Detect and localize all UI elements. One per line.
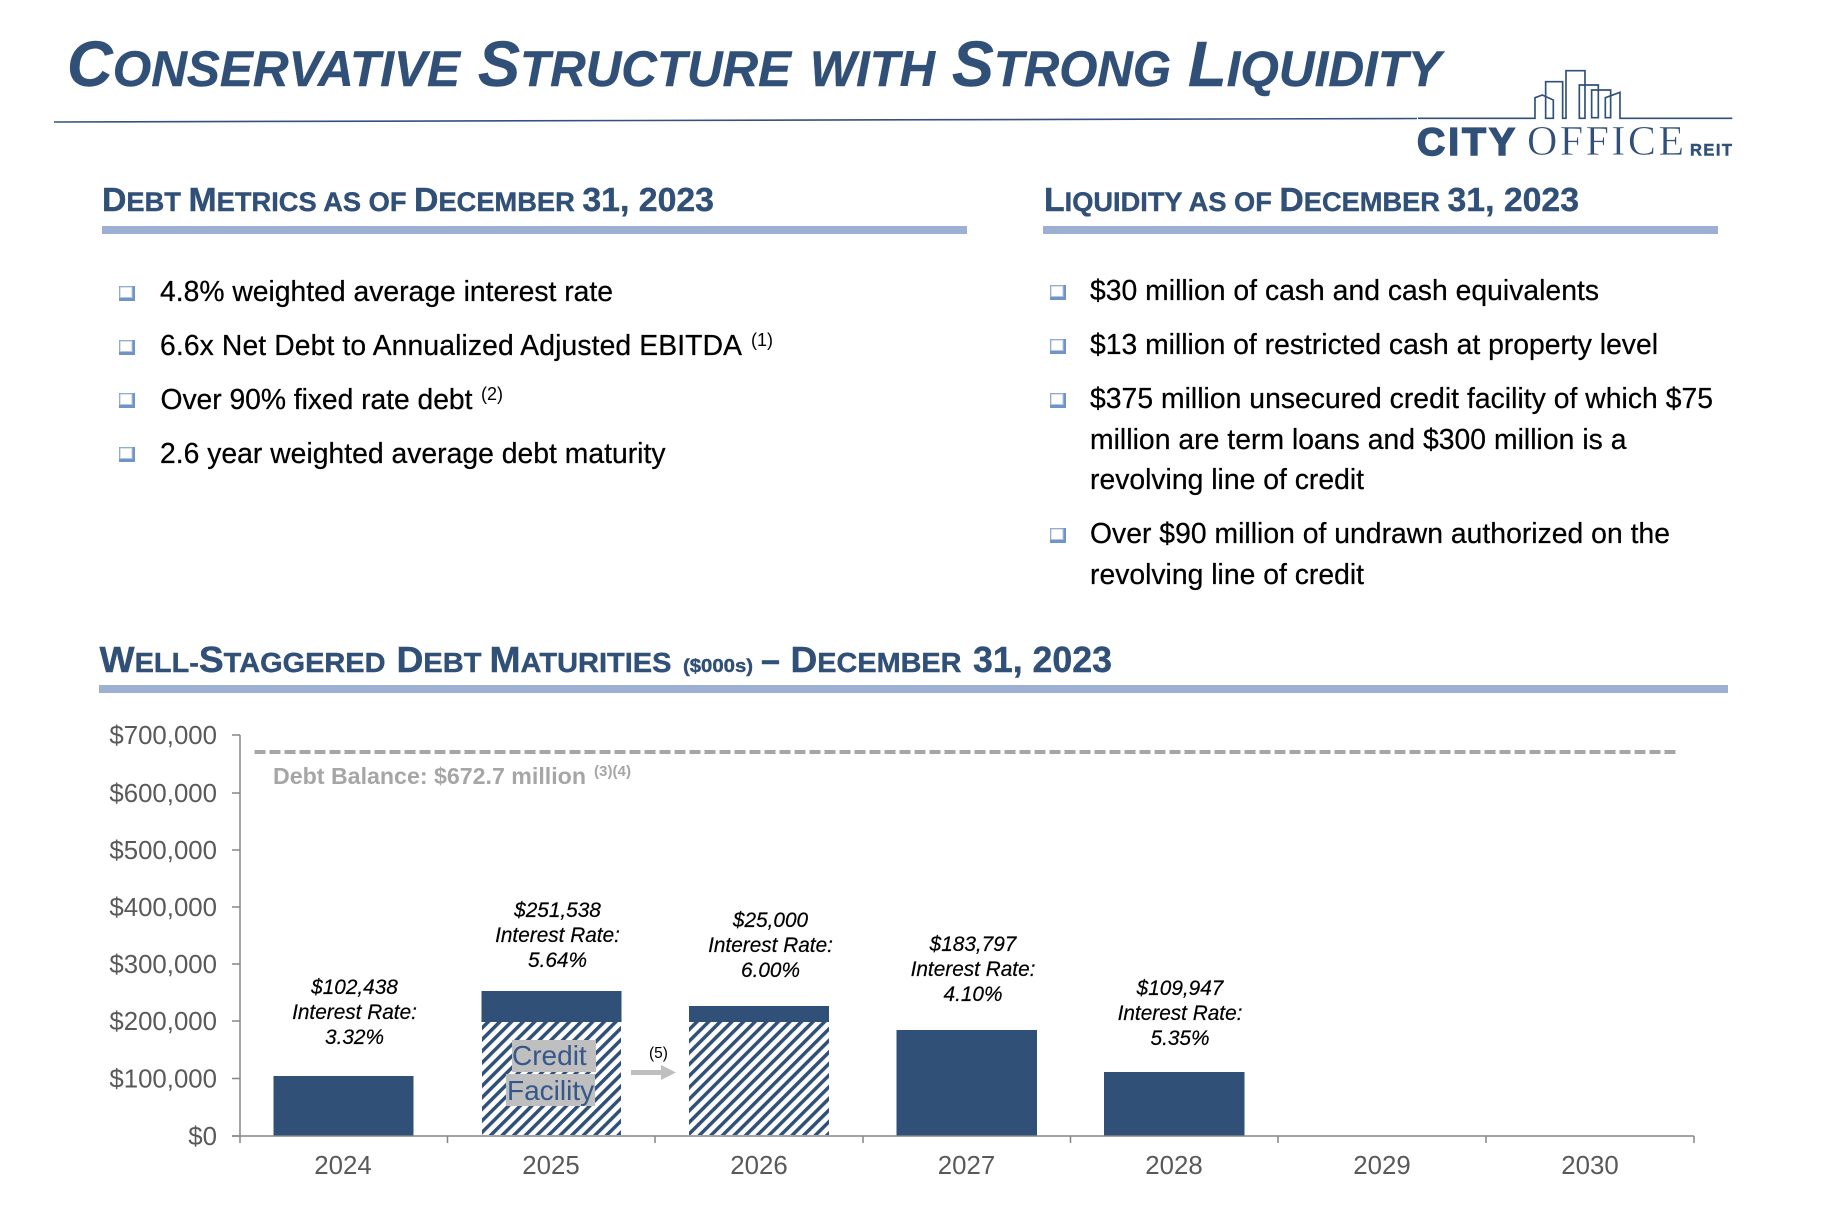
x axis: 2027: [938, 1152, 995, 1180]
y axis: $400,000: [109, 894, 217, 922]
x axis: 2030: [1561, 1152, 1619, 1180]
bullet: cash: $30 million of cash and cash equivalents: [1090, 274, 1599, 306]
bullet: restricted cash: $13 million of restricted cash at property level: [1090, 328, 1658, 360]
bar chart: debt maturities: [109, 722, 1694, 1180]
label: 2028: $109,947: [1136, 977, 1225, 1000]
bullet: undrawn: Over $90 million of undrawn authorized on the: [1090, 517, 1670, 549]
label: 2027: Interest Rate:: [911, 958, 1035, 981]
heading: debt maturities: WELL-STAGGERED: [100, 639, 386, 680]
heading: debt maturities: –: [761, 639, 780, 680]
bullet: interest rate: 4.8% weighted average interest rate: [160, 275, 613, 307]
label: 2025: Interest Rate:: [495, 924, 620, 947]
x axis: 2029: [1353, 1152, 1411, 1180]
heading: debt metrics: DEBT METRICS AS OF DECEMBER 31, 2023: [102, 182, 714, 219]
title: STRONG: [952, 28, 1171, 100]
title: STRUCTURE: [478, 28, 793, 100]
heading: debt maturities: ($000s): [683, 656, 753, 676]
heading: debt maturities: [100, 639, 1112, 680]
y axis: $700,000: [109, 722, 217, 750]
y axis: $300,000: [109, 951, 217, 979]
logo wordmark: Office: OFFICE: [1527, 119, 1684, 165]
heading: debt maturities: 31, 2023: [973, 639, 1112, 680]
heading bar: [99, 685, 1728, 693]
label: 2027: 4.10%: [944, 983, 1002, 1006]
arrow: refinance to 2026: (5): [649, 1045, 668, 1062]
bullet: net debt to EBITDA: (1): [751, 330, 773, 350]
bar: 2024: [274, 1076, 414, 1136]
logo wordmark: City: CITY: [1417, 121, 1515, 164]
label: 2028: Interest Rate:: [1118, 1002, 1242, 1025]
logo wordmark: REIT: REIT: [1690, 142, 1732, 160]
label: 2024: 3.32%: [325, 1026, 384, 1049]
bar: 2028: [1104, 1072, 1244, 1136]
panel: debt metrics: [102, 182, 967, 469]
debt balance line: Debt Balance: $672.7 million: [273, 763, 586, 789]
title: WITH: [810, 41, 936, 97]
bullet: debt maturity: 2.6 year weighted average debt maturity: [160, 437, 666, 469]
label: 2025: $251,538: [513, 899, 601, 922]
bar: 2027: [896, 1030, 1037, 1136]
callout: credit facility: Credit: [512, 1040, 587, 1071]
label: 2026: Interest Rate:: [708, 934, 833, 957]
debt balance line: (3)(4): [594, 764, 631, 780]
title: CONSERVATIVE: [67, 28, 462, 100]
y axis: [109, 722, 240, 1151]
bar: 2026 credit facility portion: [689, 1022, 829, 1135]
bullet: fixed rate debt: (2): [481, 384, 503, 404]
panel: liquidity: [1043, 182, 1718, 590]
x axis: [232, 1136, 1694, 1180]
heading bar: [1043, 226, 1718, 234]
x axis: 2025: [522, 1152, 580, 1180]
title rule: [54, 118, 1417, 122]
label: 2027: $183,797: [929, 933, 1018, 956]
y axis: $200,000: [109, 1008, 217, 1036]
bar: 2025 term portion: [482, 991, 622, 1022]
bullet: credit facility: million are term loans and $300 million is a: [1090, 423, 1627, 455]
label: 2028: 5.35%: [1151, 1027, 1209, 1050]
y axis: $0: [188, 1123, 217, 1151]
bullet: undrawn: revolving line of credit: [1090, 558, 1364, 590]
callout: credit facility: Facility: [507, 1075, 594, 1106]
debt balance line: [254, 752, 1678, 789]
x axis: 2026: [730, 1152, 788, 1180]
bullet: net debt to EBITDA: 6.6x Net Debt to Annualized Adjusted EBITDA: [160, 329, 742, 361]
logo: City Office REIT: [1417, 71, 1732, 165]
bar: 2025 credit facility portion: [482, 1022, 621, 1135]
bullet: undrawn: [1050, 517, 1670, 590]
label: 2024: Interest Rate:: [292, 1001, 417, 1024]
label: 2026: $25,000: [732, 909, 809, 932]
bullet: fixed rate debt: Over 90% fixed rate debt: [160, 383, 473, 415]
title: LIQUIDITY: [1188, 28, 1446, 100]
heading: liquidity: LIQUIDITY AS OF DECEMBER 31, 2023: [1044, 182, 1579, 219]
y axis: $100,000: [109, 1066, 217, 1094]
title: [67, 28, 1446, 100]
heading: debt maturities: DEBT MATURITIES: [396, 639, 672, 680]
y axis: $500,000: [109, 837, 217, 865]
callout: credit facility: [506, 1040, 596, 1106]
bar: 2026 term portion: [689, 1006, 829, 1022]
bullet: credit facility: revolving line of credit: [1090, 463, 1364, 495]
y axis: $600,000: [109, 780, 217, 808]
x axis: 2028: [1145, 1152, 1203, 1180]
heading: debt maturities: DECEMBER: [790, 639, 962, 680]
label: 2025: 5.64%: [528, 949, 587, 972]
label: 2026: 6.00%: [741, 959, 800, 982]
x axis: 2024: [314, 1152, 372, 1180]
label: 2024: $102,438: [310, 976, 398, 999]
icon: skyline: [1418, 71, 1732, 118]
bullet: credit facility: [1050, 382, 1713, 495]
bullet: credit facility: $375 million unsecured credit facility of which $75: [1090, 382, 1713, 414]
heading bar: [102, 226, 967, 234]
arrow: refinance to 2026: [631, 1045, 676, 1080]
